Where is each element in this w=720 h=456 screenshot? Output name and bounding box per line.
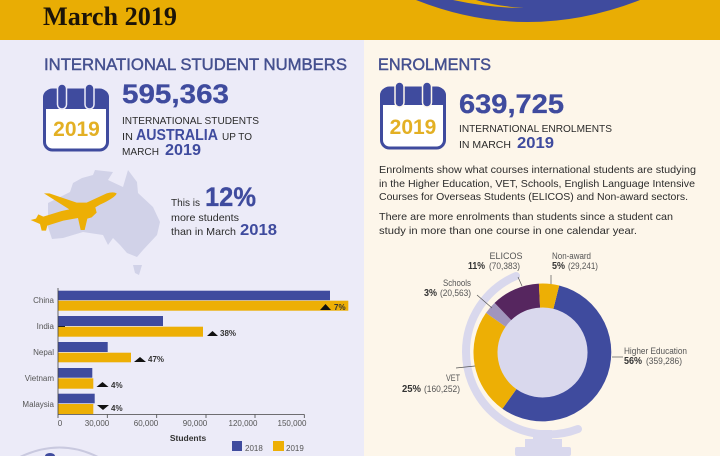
label: Schools: (20,563) xyxy=(440,288,471,298)
text: international students in Australia up to March 2019: UP TO xyxy=(222,131,252,143)
icon: calendar 2019 enrolments: 2019 xyxy=(390,116,436,139)
chart axes: 150,000 xyxy=(278,419,307,428)
label: Schools: 3% xyxy=(424,287,438,299)
label: Non-award: (29,241) xyxy=(568,261,598,271)
text: international students in Australia up to March 2019: IN xyxy=(122,131,133,143)
label: VET: VET xyxy=(446,373,460,383)
label: Non-award xyxy=(551,251,598,284)
text block: enrolments explanation: There are more enrolments than students since a student can xyxy=(379,211,673,223)
text: international enrolments in March 2019: INTERNATIONAL ENROLMENTS xyxy=(459,123,612,135)
icon: partial globe at bottom left xyxy=(20,448,98,456)
bars: Malaysia xyxy=(22,394,123,414)
slice: VET 25% xyxy=(473,313,516,409)
label: Higher Education: Higher Education xyxy=(624,346,687,356)
text: international students in Australia up to March 2019 xyxy=(122,115,259,159)
header band xyxy=(0,0,720,40)
icon: calendar 2019 enrolments xyxy=(380,82,446,148)
bars: China: 7% xyxy=(334,303,346,312)
legend: 2019 xyxy=(286,444,304,453)
heading: enrolments: ENROLMENTS xyxy=(378,55,491,74)
icon: calendar 2019 students: 2019 xyxy=(53,118,100,141)
text block: enrolments explanation: study in more than one course in one calendar year. xyxy=(379,225,637,237)
label: Schools: Schools xyxy=(443,278,471,288)
label: ELICOS: 11% xyxy=(468,260,486,272)
legend xyxy=(232,441,304,453)
label: Higher Education: (359,286) xyxy=(646,356,682,366)
chart axes: 30,000 xyxy=(85,419,110,428)
text block: enrolments explanation: Enrolments show what courses international students are studying xyxy=(379,164,696,176)
header globe swoosh xyxy=(416,0,640,22)
slice: Higher Education 56% xyxy=(502,286,611,421)
label: Higher Education xyxy=(612,346,687,367)
text: 12% more students than in March 2018: than in March xyxy=(171,226,236,238)
icon: globe stand xyxy=(466,276,578,456)
label: ELICOS: (70,383) xyxy=(489,261,520,271)
text: 12% more students than in March 2018: 2018 xyxy=(240,222,277,239)
label: VET: 25% xyxy=(402,383,422,395)
label: Non-award: 5% xyxy=(552,260,566,272)
label: ELICOS: ELICOS xyxy=(489,251,523,261)
slice: Non-award 5% xyxy=(539,283,559,309)
panel: enrolments background xyxy=(364,40,720,456)
stat: 595,363: 595,363 xyxy=(122,79,229,109)
icon: map of Australia xyxy=(48,170,160,275)
bars: China xyxy=(33,291,348,312)
icon: aeroplane xyxy=(31,192,117,231)
title: March 2019 xyxy=(43,2,177,31)
panel: international student numbers background xyxy=(0,40,364,456)
bars: India: 38% xyxy=(220,329,236,338)
bar chart: students by country xyxy=(22,288,348,453)
bars: Nepal: 47% xyxy=(148,355,164,364)
heading: international student numbers: INTERNATIONAL STUDENT NUMBERS xyxy=(44,55,347,74)
bars: India: India xyxy=(37,322,55,331)
bars: Vietnam xyxy=(25,368,123,390)
bars: Vietnam: Vietnam xyxy=(25,374,54,383)
stat: 639,725: 639,725 xyxy=(459,89,564,119)
text: international students in Australia up to March 2019: INTERNATIONAL STUDENTS xyxy=(122,115,259,127)
chart axes: 90,000 xyxy=(183,419,208,428)
text: 12% more students than in March 2018 xyxy=(171,182,277,239)
bars: China: China xyxy=(33,296,55,305)
label: Schools xyxy=(424,278,492,308)
text: 12% more students than in March 2018: This is xyxy=(171,197,200,209)
bars: Nepal: Nepal xyxy=(33,348,54,357)
text: international students in Australia up to March 2019: MARCH xyxy=(122,146,159,158)
chart axes xyxy=(58,288,307,428)
text: international enrolments in March 2019: IN MARCH xyxy=(459,139,511,151)
text: international students in Australia up to March 2019: AUSTRALIA xyxy=(136,127,218,144)
text block: enrolments explanation: Courses for Overseas Students (ELICOS) and Non-award sectors. xyxy=(379,191,688,203)
text: international enrolments in March 2019 xyxy=(459,123,612,152)
chart axes: 120,000 xyxy=(229,419,258,428)
label: VET: (160,252) xyxy=(424,384,460,394)
bars: Nepal xyxy=(33,342,164,364)
text: 12% more students than in March 2018: more students xyxy=(171,212,239,224)
text: international students in Australia up to March 2019: 2019 xyxy=(165,142,201,159)
label: Non-award: Non-award xyxy=(552,251,591,261)
bars: Vietnam: 4% xyxy=(111,381,123,390)
slice: ELICOS 11% xyxy=(495,284,540,320)
label: ELICOS xyxy=(468,251,523,286)
slice: Schools 3% xyxy=(486,303,511,327)
text: 12% more students than in March 2018: 12% xyxy=(205,182,256,212)
text block: enrolments explanation: in the Higher Education, VET, Schools, English Language Intensive xyxy=(379,178,695,190)
icon: calendar 2019 students xyxy=(43,84,109,150)
bars: India xyxy=(37,316,236,338)
label: VET xyxy=(402,366,475,395)
axis title: Students xyxy=(170,433,206,443)
text: international enrolments in March 2019: 2019 xyxy=(517,135,554,152)
bars: Malaysia: 4% xyxy=(111,404,123,413)
chart axes: 60,000 xyxy=(134,419,159,428)
legend: 2018 xyxy=(245,444,263,453)
donut chart: enrolments by sector xyxy=(473,283,611,421)
label: Higher Education: 56% xyxy=(624,355,643,367)
chart axes: 0 xyxy=(58,419,63,428)
bars: Malaysia: Malaysia xyxy=(22,400,55,409)
text block: enrolments explanation xyxy=(379,164,696,237)
